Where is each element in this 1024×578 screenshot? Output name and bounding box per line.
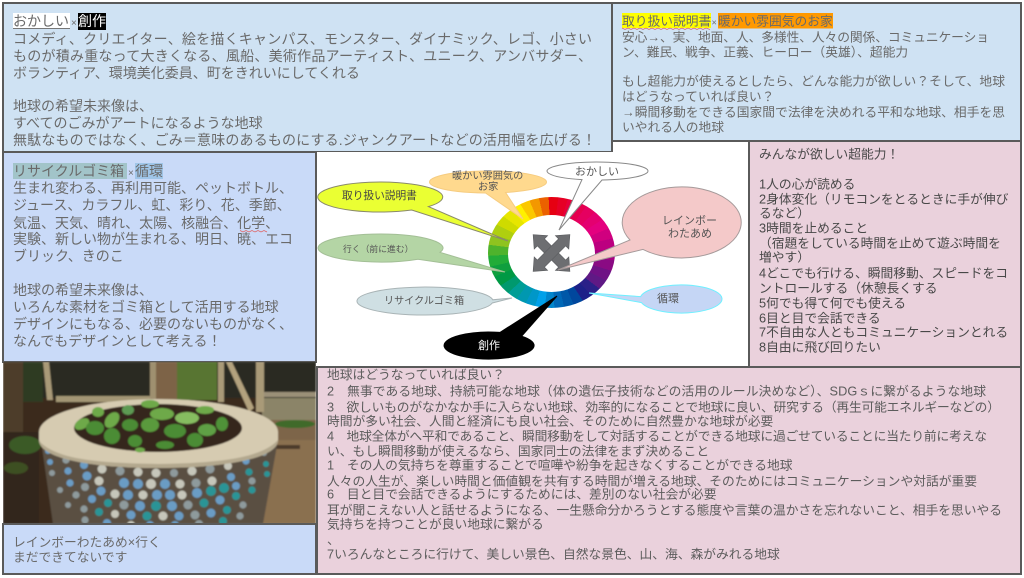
- panel: みんなが欲しい超能力: 8自由に飛び回りたい: [759, 340, 881, 354]
- panel: みんなが欲しい超能力: 6目と目で会話できる: [759, 310, 881, 326]
- panel: おかしい×創作: おかしい: [13, 13, 69, 29]
- planter rim: [39, 399, 278, 468]
- panel: おかしい×創作: ×: [71, 18, 77, 29]
- panel: みんなが欲しい超能力: 7不自由な人ともコミュニケーションとれる: [759, 324, 1008, 340]
- panel: リサイクルゴミ箱×循環: 生まれ変わる、再利用可能、ペットボトル、: [13, 180, 293, 196]
- callout: 循環: 循環: [657, 292, 679, 305]
- panel: みんなが欲しい超能力: 2身体変化（リモコンをとるときに手が伸び: [759, 192, 1009, 206]
- callout: レインボーわたあめ: [558, 187, 741, 270]
- panel: リサイクルゴミ箱×循環: 気温、天気、晴れ、太陽、核融合、化学、: [13, 215, 279, 231]
- panel: 地球はどうなっていれば良い？: 耳が聞こえない人と話せるようになる、一生懸命分かろうとする態度や言葉の温かさを忘れないこと、相手を思いやる: [327, 502, 1002, 518]
- panel: 取り扱い説明書×暖かい雰囲気のお家: [613, 2, 1022, 142]
- panel: リサイクルゴミ箱×循環: 循環: [135, 163, 163, 179]
- callout: リサイクルゴミ箱: リサイクルゴミ箱: [384, 294, 464, 307]
- panel: みんなが欲しい超能力: みんなが欲しい超能力！: [759, 146, 899, 162]
- soil and plants: [74, 404, 242, 452]
- panel: みんなが欲しい超能力: 4どこでも行ける、瞬間移動、スピードをコ: [759, 266, 1008, 280]
- callout: 創作: 創作: [478, 339, 500, 352]
- panel: おかしい×創作: すべてのごみがアートになるような地球: [13, 115, 263, 131]
- callout: レインボーわたあめ: レインボー: [662, 214, 717, 227]
- panel: おかしい×創作: 無駄なものではなく、ごみ＝意味のあるものにする.ジャンクアートなどの活用幅を広げる！: [13, 132, 596, 148]
- panel: リサイクルゴミ箱×循環: リサイクルゴミ箱: [13, 163, 124, 179]
- panel: 取り扱い説明書×暖かい雰囲気のお家: いやれる人の地球: [622, 120, 724, 134]
- panel: リサイクルゴミ箱×循環: ジュース、カラフル、虹、彩り、花、季節、: [13, 197, 291, 213]
- color wheel: [488, 197, 615, 308]
- panel: 取り扱い説明書×暖かい雰囲気のお家: ン、難民、戦争、正義、ヒーロー（英雄）、超能力: [622, 44, 908, 60]
- panel: みんなが欲しい超能力: ントロールする（休憩長くする: [759, 280, 938, 296]
- panel: 地球はどうなっていれば良い？: 時間が多い社会、人間と経済にも良い社会、そのために自然豊かな地球が必要: [327, 414, 773, 428]
- panel: 取り扱い説明書×暖かい雰囲気のお家: ×: [712, 18, 717, 28]
- panel: 取り扱い説明書×暖かい雰囲気のお家: 安心→、実、地面、人、多様性、人々の関係、コミュニケーショ: [622, 30, 989, 44]
- panel: みんなが欲しい超能力: [748, 142, 1022, 366]
- panel: みんなが欲しい超能力: 3時間を止めること: [759, 220, 868, 236]
- callout: おかしい: おかしい: [575, 165, 619, 178]
- panel: color wheel diagram: [317, 152, 749, 367]
- panel: おかしい×創作: ボランティア、環境美化委員、町をきれいにしてくれる: [13, 65, 360, 81]
- callout: おかしい: [547, 162, 648, 230]
- callout: 行く（前に進む）: [318, 234, 505, 272]
- photo: eco-brick planter: [3, 362, 316, 523]
- panel: リサイクルゴミ箱×循環: ブリック、きのこ: [13, 248, 124, 264]
- panel: リサイクルゴミ箱×循環: ×: [128, 168, 134, 179]
- panel: 取り扱い説明書×暖かい雰囲気のお家: 暖かい雰囲気のお家: [718, 14, 833, 28]
- panel: おかしい×創作: [2, 2, 613, 152]
- panel: リサイクルゴミ箱×循環: なんでもデザインとして考える！: [13, 333, 221, 349]
- panel: 地球はどうなっていれば良い？: 7いろんなところに行けて、美しい景色、自然な景色、山、海、森がみれる地球: [327, 546, 780, 562]
- panel: 取り扱い説明書×暖かい雰囲気のお家: →瞬間移動をできる国家間で法律を決めれる平和な地球、相手を思: [622, 104, 1005, 120]
- callout: 暖かい雰囲気のお家: お家: [478, 180, 498, 193]
- panel: おかしい×創作: 地球の希望未来像は、: [13, 98, 153, 114]
- panel: リサイクルゴミ箱×循環: デザインにもなる、必要のないものがなく、: [13, 316, 293, 332]
- panel: 地球はどうなっていれば良い？: 4 地球全体がへ平和であること、瞬間移動をして対話することができる地球に過ごせていることに当たり前に考えな: [327, 428, 987, 444]
- panel: 地球はどうなっていれば良い？: [316, 366, 1022, 575]
- callout: レインボーわたあめ: わたあめ: [668, 227, 712, 240]
- callout: 創作: [444, 296, 557, 359]
- callout: 循環: [589, 285, 722, 313]
- panel: レインボーわたあめ×行く: [2, 523, 316, 575]
- panel: 取り扱い説明書×暖かい雰囲気のお家: はどうなっていれば良い？: [622, 89, 774, 104]
- panel: 地球はどうなっていれば良い？: 6 目と目で会話できるようにするためには、差別のない社会が必要: [327, 486, 717, 502]
- panel: みんなが欲しい超能力: るなど）: [759, 206, 810, 220]
- panel: レインボーわたあめ×行く: レインボーわたあめ×行く: [13, 534, 161, 550]
- panel: 地球はどうなっていれば良い？: い、もし瞬間移動が使えるなら、国家同士の法律をまず決めること: [327, 444, 709, 458]
- panel: 地球はどうなっていれば良い？: 2 無事である地球、持続可能な地球（体の遺伝子技術などの活用のルール決めなど）、SDGｓに繋がるような地球: [327, 384, 986, 398]
- panel: みんなが欲しい超能力: 増やす）: [759, 250, 810, 264]
- panel: みんなが欲しい超能力: 5何でも得て何でも使える: [759, 296, 906, 310]
- panel: レインボーわたあめ×行く: まだできてないです: [13, 550, 127, 564]
- panel: おかしい×創作: コメディ、クリエイター、絵を描くキャンパス、モンスター、ダイナミック、レゴ、小さい: [13, 31, 592, 47]
- callout: リサイクルゴミ箱: [357, 287, 512, 315]
- panel: リサイクルゴミ箱×循環: 地球の希望未来像は、: [13, 282, 153, 298]
- icon: four-way arrows: [526, 228, 577, 278]
- panel: 地球はどうなっていれば良い？: 3 欲しいものがなかなか手に入らない地球、効率的になることで地球に良い、研究する（再生可能エネルギーなどの）: [327, 400, 1000, 414]
- callout: 取り扱い説明書: 取り扱い説明書: [342, 189, 417, 202]
- panel: みんなが欲しい超能力: 1人の心が読める: [759, 176, 855, 192]
- panel: 地球はどうなっていれば良い？: 気持ちを持つことが良い地球に繋がる: [327, 516, 544, 532]
- panel: 地球はどうなっていれば良い？: 1 その人の気持ちを尊重することで喧嘩や紛争を起きなくすることができる地球: [327, 458, 793, 472]
- callout: 行く（前に進む）: 行く（前に進む）: [343, 243, 413, 254]
- callout: 暖かい雰囲気のお家: [429, 169, 546, 219]
- panel: みんなが欲しい超能力: （宿題をしている時間を止めて遊ぶ時間を: [759, 236, 1001, 250]
- planter wall: [41, 440, 278, 524]
- callout: 暖かい雰囲気のお家: 暖かい雰囲気の: [452, 169, 523, 182]
- callout: 取り扱い説明書: [318, 182, 508, 241]
- panel: 地球はどうなっていれば良い？: 人々の人生が、楽しい時間と価値観を共有する時間が増える地球、そのためにはコミュニケーションや対話が重要: [327, 474, 977, 488]
- panel: 地球はどうなっていれば良い？: 、: [327, 532, 340, 547]
- panel: 地球はどうなっていれば良い？: 地球はどうなっていれば良い？: [327, 367, 505, 382]
- panel: リサイクルゴミ箱×循環: 実験、新しい物が生まれる、明日、暁、エコ: [13, 231, 293, 247]
- panel: 取り扱い説明書×暖かい雰囲気のお家: 取り扱い説明書: [622, 14, 711, 28]
- panel: おかしい×創作: 創作: [78, 13, 106, 29]
- panel: リサイクルゴミ箱×循環: [2, 153, 317, 363]
- panel: リサイクルゴミ箱×循環: いろんな素材をゴミ箱として活用する地球: [13, 299, 279, 315]
- panel: 取り扱い説明書×暖かい雰囲気のお家: もし超能力が使えるとしたら、どんな能力が欲しい？そして、地球: [622, 74, 1005, 88]
- panel: おかしい×創作: ものが積み重なって大きくなる、風船、美術作品アーティスト、ユニーク、アンバサダー、: [13, 48, 592, 64]
